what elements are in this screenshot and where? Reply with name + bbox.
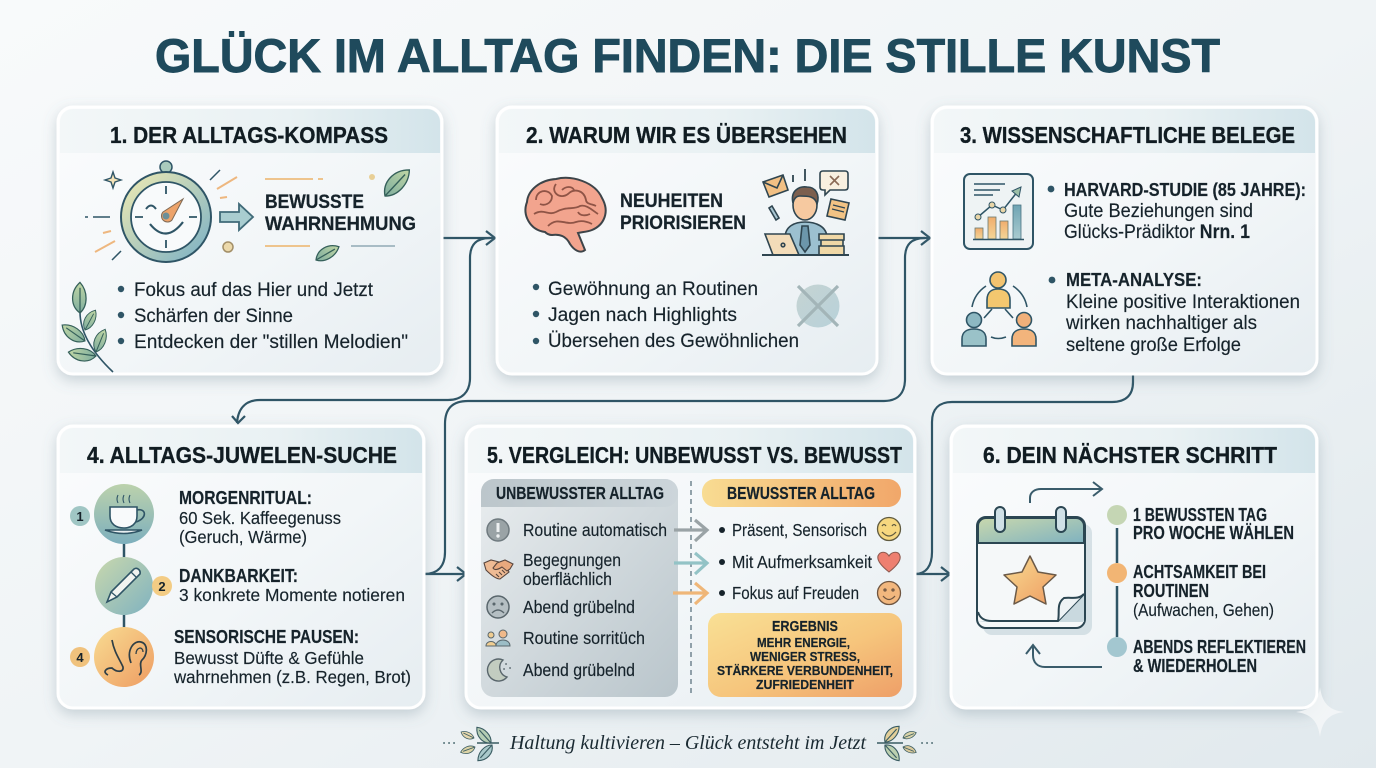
text: dankbarkeit: [179, 566, 405, 605]
text: left rows: oberflächlich: [523, 569, 612, 589]
icon: calendar with star: [977, 507, 1092, 635]
callout: ergebnis: ERGEBNIS: [772, 619, 838, 635]
label: neuheiten priorisieren: NEUHEITEN: [620, 191, 723, 212]
text: right rows: Mit Aufmerksamkeit: [732, 552, 872, 572]
column header left: UNBEWUSSTER ALLTAG: [496, 483, 664, 503]
column header right: [702, 479, 901, 507]
text: step 3: & WIEDERHOLEN: [1133, 656, 1257, 676]
footer tagline: [444, 723, 932, 764]
badge 2: [152, 576, 172, 596]
text: step 2: [1133, 562, 1274, 620]
label: bewusste wahrnehmung: BEWUSSTE: [265, 192, 364, 213]
icon: moon: [487, 659, 510, 681]
icon: sad face: [487, 596, 509, 618]
bullet list: Schärfen der Sinne: [134, 306, 293, 327]
label: bewusste wahrnehmung: WAHRNEHMUNG: [265, 214, 416, 235]
panel 5: vergleich: [466, 426, 915, 708]
icon: left sprig: [444, 725, 499, 764]
callout: ergebnis: WENIGER STRESS,: [750, 649, 860, 664]
icon: chart: [964, 174, 1033, 249]
icon: brain: [526, 178, 606, 252]
text: step 1: [1133, 505, 1294, 543]
sparkle: [1296, 687, 1344, 737]
text: harvard-studie: Glücks-Prädiktor Nrn. 1: [1064, 222, 1250, 243]
badge 1: [70, 506, 90, 526]
icon: handshake: [484, 560, 513, 579]
panel 4: alltags-juwelen-suche: [58, 426, 424, 708]
icon: coffee cup: [94, 484, 154, 544]
column: bewusster alltag: [702, 479, 902, 697]
icon: nose and ear: [94, 627, 154, 687]
text: left rows: Abend grübelnd: [523, 597, 635, 617]
text: morgenritual: (Geruch, Wärme): [179, 527, 307, 547]
heading 3: 3. WISSENSCHAFTLICHE BELEGE: [960, 122, 1295, 148]
text: left rows: Abend grübelnd: [523, 660, 635, 680]
text: meta-analyse: Kleine positive Interaktionen: [1066, 292, 1300, 313]
text: step 3: ABENDS REFLEKTIEREN: [1133, 637, 1306, 657]
column header left: [481, 479, 678, 507]
text: sensorische pausen: [173, 627, 411, 687]
text: morgenritual: [179, 488, 341, 547]
heading 6: 6. DEIN NÄCHSTER SCHRITT: [983, 442, 1278, 468]
column: unbewusster alltag: [481, 479, 678, 697]
text: sensorische pausen: SENSORISCHE PAUSEN:: [174, 627, 359, 647]
callout: ergebnis: MEHR ENERGIE,: [757, 635, 850, 650]
text: step 2: (Aufwachen, Gehen): [1133, 600, 1274, 620]
text: meta-analyse: [1049, 270, 1300, 356]
icon: connected people: [962, 272, 1036, 346]
icon: right sprig: [877, 723, 932, 763]
text: sensorische pausen: Bewusst Düfte & Gefühle: [174, 648, 364, 668]
icon: crossed circle: [796, 284, 840, 328]
callout: ergebnis: [708, 613, 902, 697]
timeline connector: [123, 540, 125, 632]
text: left rows: Routine automatisch: [523, 520, 667, 540]
text: dankbarkeit: DANKBARKEIT:: [179, 566, 298, 586]
heading 4: 4. ALLTAGS-JUWELEN-SUCHE: [87, 442, 397, 468]
text: morgenritual: 60 Sek. Kaffeegenuss: [179, 508, 341, 528]
title: GLÜCK IM ALLTAG FINDEN: DIE STILLE KUNST: [155, 29, 1220, 82]
icon: warning: [487, 519, 509, 541]
connector arrows: [232, 238, 1133, 574]
heading 2: 2. WARUM WIR ES ÜBERSEHEN: [526, 122, 847, 148]
panel 1: der alltags-kompass: [58, 107, 442, 374]
text: dankbarkeit: 3 konkrete Momente notieren: [179, 585, 405, 605]
text: right rows: Präsent, Sensorisch: [732, 520, 867, 540]
icon: plant sprig: [58, 282, 113, 372]
icon: happy face: [878, 582, 900, 604]
panel 3: wissenschaftliche belege: [932, 107, 1317, 374]
badge 4: 4: [76, 650, 84, 665]
text: left rows: Begegnungen: [523, 550, 621, 570]
icon: two people: [486, 630, 510, 646]
label: neuheiten priorisieren: [620, 191, 746, 234]
text: right rows: [719, 520, 872, 603]
label: neuheiten priorisieren: PRIORISIEREN: [620, 213, 746, 234]
callout: ergebnis: ZUFRIEDENHEIT: [756, 677, 854, 692]
text: harvard-studie: [1048, 180, 1306, 243]
text: meta-analyse: META-ANALYSE:: [1066, 270, 1202, 290]
tagline text: Haltung kultivieren – Glück entsteht im Jetzt: [509, 732, 866, 754]
arrows between columns: [673, 520, 707, 604]
bullet list: [533, 279, 799, 352]
badge 2: 2: [158, 579, 166, 594]
callout: ergebnis: STÄRKERE VERBUNDENHEIT,: [717, 663, 893, 678]
heading 5: 5. VERGLEICH: UNBEWUSST VS. BEWUSST: [487, 442, 903, 468]
divider: [690, 481, 692, 697]
badge 4: [70, 647, 90, 667]
timeline: [1107, 505, 1127, 657]
text: left rows: Routine sorritüch: [523, 628, 645, 648]
badge 1: 1: [76, 509, 84, 524]
bullet list: Fokus auf das Hier und Jetzt: [134, 280, 374, 301]
panel 6: dein nächster schritt: [951, 426, 1317, 708]
icon: heart: [878, 552, 900, 572]
text: right rows: Fokus auf Freuden: [732, 583, 859, 603]
text: step 2: ACHTSAMKEIT BEI: [1133, 562, 1266, 582]
column header right: BEWUSSTER ALLTAG: [727, 483, 875, 503]
icon: distracted person at desk: [762, 169, 849, 255]
arrow: loop out: [1030, 482, 1102, 503]
text: step 1: PRO WOCHE WÄHLEN: [1133, 523, 1294, 543]
text: sensorische pausen: wahrnehmen (z.B. Regen, Brot): [173, 667, 411, 687]
bullet list: Übersehen des Gewöhnlichen: [548, 331, 799, 352]
bullet list: Entdecken der "stillen Melodien": [134, 332, 408, 353]
text: left rows: [523, 520, 667, 680]
heading 1: 1. DER ALLTAGS-KOMPASS: [110, 122, 388, 148]
label: bewusste wahrnehmung: [265, 192, 416, 235]
text: step 2: ROUTINEN: [1133, 581, 1209, 601]
text: harvard-studie: Gute Beziehungen sind: [1064, 201, 1253, 222]
icon: smile: [878, 518, 900, 540]
decorative leaves and lines: [265, 164, 415, 265]
arrow: loop back: [1026, 645, 1102, 667]
icon: arrow to awareness: [220, 204, 253, 230]
bullet list: Jagen nach Highlights: [548, 305, 737, 326]
text: meta-analyse: wirken nachhaltiger als: [1065, 313, 1257, 334]
text: step 1: 1 BEWUSSTEN TAG: [1133, 505, 1267, 525]
bullet list: [118, 280, 408, 353]
bullet list: Gewöhnung an Routinen: [548, 279, 758, 300]
text: meta-analyse: seltene große Erfolge: [1066, 335, 1241, 356]
text: harvard-studie: HARVARD-STUDIE (85 JAHRE):: [1064, 180, 1306, 200]
icon: smiling stopwatch: [85, 161, 237, 262]
panel 2: warum wir es übersehen: [497, 107, 877, 374]
text: step 3: [1133, 637, 1306, 676]
text: morgenritual: MORGENRITUAL:: [179, 488, 312, 508]
icon: pen: [95, 557, 153, 615]
